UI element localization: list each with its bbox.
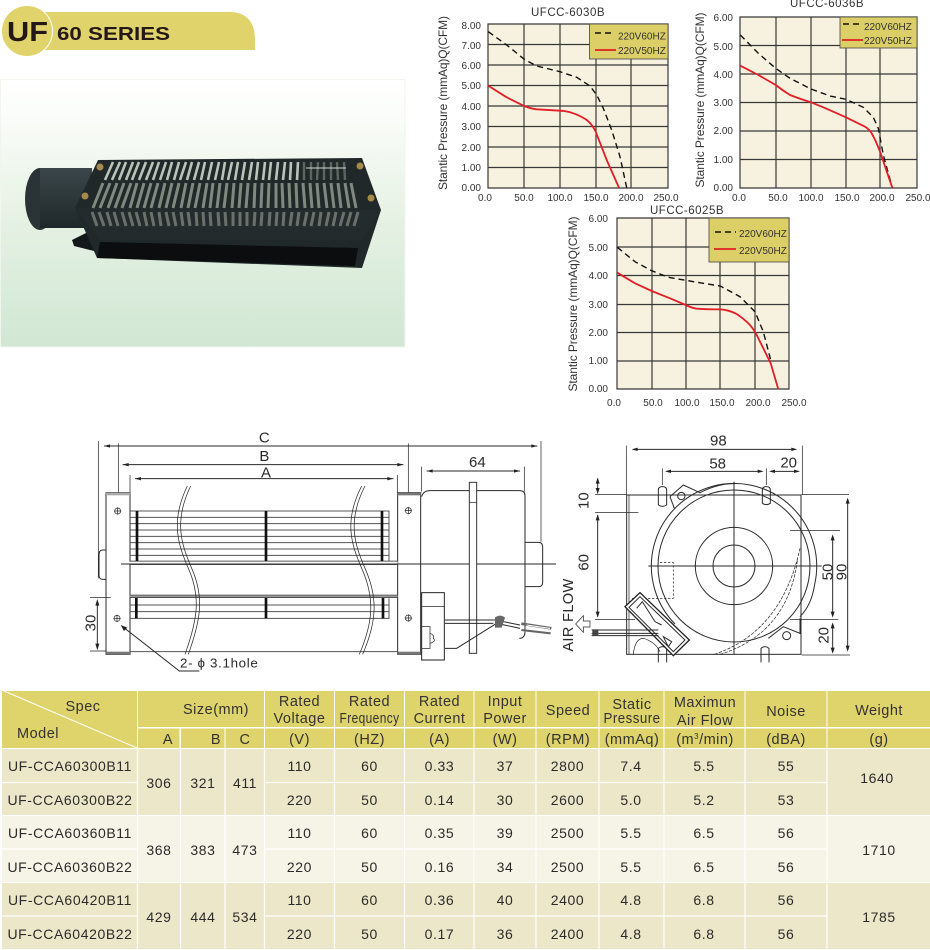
table header: C	[240, 732, 250, 748]
chart: UFCC-6030B: 1.00	[462, 163, 481, 174]
table group: UF-CCA60360	[7, 825, 896, 875]
end view technical drawing	[561, 433, 851, 662]
table header: Static	[612, 697, 652, 713]
dimension lines C B A 64: B	[259, 448, 269, 465]
table group: UF-CCA60420: 60	[361, 892, 378, 908]
table header: (W)	[493, 732, 517, 748]
table group: UF-CCA60360: 60	[361, 825, 378, 841]
dimension lines right: 90	[834, 564, 851, 580]
dimension lines right: 50	[819, 564, 836, 580]
table header: Speed	[546, 703, 590, 719]
table group: UF-CCA60420: 429	[146, 909, 172, 925]
series title banner	[2, 6, 255, 56]
table header: A	[163, 732, 173, 748]
table header: (V)	[289, 732, 310, 748]
legend: 220V50HZ	[739, 246, 787, 257]
dimension: 30	[82, 597, 111, 651]
table group: UF-CCA60300: 110	[287, 758, 312, 774]
table group: UF-CCA60420	[7, 892, 896, 942]
terminal block	[592, 593, 689, 656]
chart: UFCC-6030B: 7.00	[462, 41, 481, 52]
table group: UF-CCA60300: 1640	[860, 770, 894, 786]
chart: UFCC-6036B: 200.0	[869, 193, 895, 204]
table group: UF-CCA60420: UF-CCA60420B11	[8, 892, 132, 908]
table group: UF-CCA60360: UF-CCA60360B22	[7, 859, 133, 875]
table group: UF-CCA60360: 473	[232, 842, 258, 858]
fan circles	[632, 482, 822, 654]
table group: UF-CCA60360: 6.5	[693, 825, 715, 841]
table header: (m	[676, 732, 694, 748]
chart: UFCC-6025B	[566, 205, 807, 409]
table group: UF-CCA60420: 0.36	[425, 892, 454, 908]
hole callout	[121, 625, 258, 671]
table group: UF-CCA60420: 2400	[551, 892, 584, 908]
table group: UF-CCA60300: 0.33	[425, 758, 454, 774]
chart: UFCC-6030B: 5.00	[462, 81, 481, 92]
table group: UF-CCA60420: 444	[190, 909, 216, 925]
chart: UFCC-6030B: 50.0	[514, 193, 534, 204]
table group: UF-CCA60420: 36	[497, 926, 513, 942]
dimension lines C B A 64: 64	[469, 454, 486, 471]
table group: UF-CCA60420: 6.8	[693, 926, 715, 942]
table group: UF-CCA60300: UF-CCA60300B11	[8, 758, 132, 774]
table group: UF-CCA60300: 411	[233, 775, 257, 791]
table group: UF-CCA60300: 321	[190, 775, 216, 791]
hole callout: 2- ϕ 3.1hole	[180, 655, 258, 670]
table header: Power	[483, 711, 527, 727]
dimension lines left: 10	[575, 492, 592, 509]
table group: UF-CCA60300: 2600	[551, 792, 584, 808]
table header: Pressure	[604, 711, 660, 727]
chart: UFCC-6025B: 1.00	[589, 356, 608, 367]
product photo panel	[0, 80, 405, 347]
chart: UFCC-6030B: 4.00	[462, 102, 481, 113]
chart: UFCC-6025B: 150.0	[709, 398, 735, 409]
y axis labels: 6.00	[714, 13, 733, 24]
table group: UF-CCA60300: 306	[146, 775, 172, 791]
table group: UF-CCA60360: 56	[778, 859, 794, 875]
table group: UF-CCA60300: 50	[361, 792, 378, 808]
table group: UF-CCA60360: 50	[361, 859, 378, 875]
housing outline	[627, 495, 801, 654]
table group: UF-CCA60300: 5.0	[620, 792, 642, 808]
table header: (A)	[429, 732, 450, 748]
table header	[2, 691, 930, 748]
side view technical drawing	[82, 429, 556, 671]
chart: UFCC-6025B: 250.0	[781, 398, 807, 409]
dimension lines top: 98	[710, 433, 727, 450]
table header: Noise	[766, 704, 806, 720]
table group: UF-CCA60300: 53	[778, 792, 794, 808]
table header: Weight	[855, 703, 903, 719]
table group: UF-CCA60360: 34	[497, 859, 513, 875]
table header: Air Flow	[677, 713, 733, 729]
chart: UFCC-6036B	[693, 0, 930, 204]
icon: fan motor	[25, 168, 98, 252]
table header: Model	[17, 726, 59, 742]
series title banner: UF	[7, 16, 48, 47]
table header: (RPM)	[546, 732, 590, 748]
chart: UFCC-6025B: 200.0	[745, 398, 771, 409]
table header: 3	[694, 732, 699, 741]
table group: UF-CCA60300: UF-CCA60300B22	[7, 792, 133, 808]
60Hz curve	[488, 32, 627, 188]
dimension lines C B A 64	[98, 429, 541, 578]
60Hz curve	[740, 35, 892, 188]
table header: Input	[488, 694, 522, 710]
table group: UF-CCA60420: 534	[232, 909, 258, 925]
y axis labels: 8.00	[462, 21, 481, 32]
y axis title: Stantic Pressure (mmAq)Q(CFM)	[693, 12, 707, 188]
table group: UF-CCA60360: 110	[287, 825, 312, 841]
table group: UF-CCA60300: 30	[497, 792, 513, 808]
50Hz curve	[488, 86, 619, 188]
table group: UF-CCA60360: 56	[778, 825, 794, 841]
icon: blower housing	[75, 158, 381, 268]
table group: UF-CCA60360: 5.5	[620, 825, 642, 841]
y axis title: Stantic Pressure (mmAq)Q(CFM)	[436, 16, 450, 190]
table group: UF-CCA60300: 5.2	[693, 792, 715, 808]
chart: UFCC-6030B: 250.0	[653, 193, 679, 204]
table group: UF-CCA60360: 2500	[551, 825, 584, 841]
y axis title: Stantic Pressure (mmAq)Q(CFM)	[566, 216, 580, 392]
50Hz curve	[740, 66, 892, 188]
table group: UF-CCA60360: 39	[497, 825, 513, 841]
dimension lines top: 58	[709, 455, 726, 472]
x axis labels: 0.0	[732, 193, 746, 204]
table group: UF-CCA60420: 4.8	[620, 926, 642, 942]
table group: UF-CCA60360: 383	[190, 842, 216, 858]
dimension lines top: 20	[780, 454, 797, 471]
legend: 220V50HZ	[618, 46, 666, 57]
chart: UFCC-6036B: 4.00	[714, 70, 733, 81]
chart title: UFCC-6030B	[531, 7, 605, 19]
table group: UF-CCA60300: 55	[778, 758, 794, 774]
chart title: UFCC-6025B	[650, 205, 724, 217]
table group: UF-CCA60420: 56	[778, 926, 794, 942]
mounting slots	[658, 487, 770, 662]
table header: (mmAq)	[605, 732, 659, 748]
table header: (dBA)	[766, 732, 806, 748]
table group: UF-CCA60420: 56	[778, 892, 794, 908]
table header: /min)	[699, 732, 734, 748]
chart: UFCC-6025B: 5.00	[589, 243, 608, 254]
table group: UF-CCA60420: 40	[497, 892, 513, 908]
dimension lines right: 20	[815, 627, 832, 644]
table header: Size(mm)	[183, 702, 249, 718]
table group: UF-CCA60300: 7.4	[620, 758, 642, 774]
chart: UFCC-6036B: 0.00	[714, 183, 733, 194]
legend	[709, 218, 789, 262]
table row backgrounds	[2, 749, 930, 949]
legend: 220V50HZ	[864, 36, 912, 47]
table group: UF-CCA60300: 0.14	[425, 792, 454, 808]
table header: B	[211, 732, 221, 748]
table group: UF-CCA60300: 2800	[551, 758, 584, 774]
table group: UF-CCA60300: 5.5	[693, 758, 715, 774]
chart: UFCC-6025B: 0.00	[589, 384, 608, 395]
table header: Current	[414, 711, 465, 727]
chart: UFCC-6036B: 250.0	[905, 193, 930, 204]
dimension lines left: 60	[575, 554, 592, 571]
chart: UFCC-6036B: 150.0	[834, 193, 860, 204]
chart: UFCC-6036B: 100.0	[798, 193, 824, 204]
chart: UFCC-6036B: 1.00	[714, 155, 733, 166]
table header: Rated	[419, 694, 460, 710]
dimension lines top	[626, 433, 802, 495]
x axis labels: 0.0	[478, 193, 492, 204]
table header: Rated	[279, 694, 320, 710]
60Hz curve	[617, 247, 771, 360]
table group: UF-CCA60420: 4.8	[620, 892, 642, 908]
chart: UFCC-6030B: 100.0	[547, 193, 573, 204]
air flow label and arrow: AIR FLOW	[561, 578, 577, 652]
chart: UFCC-6036B: 5.00	[714, 42, 733, 53]
legend: 220V60HZ	[739, 229, 787, 240]
end plates	[99, 493, 421, 654]
table group: UF-CCA60420: 6.8	[693, 892, 715, 908]
break lines	[177, 486, 374, 654]
table group: UF-CCA60420: 0.17	[425, 926, 454, 942]
table group: UF-CCA60360: 220	[287, 859, 312, 875]
table header: Voltage	[274, 711, 325, 727]
chart: UFCC-6036B: 50.0	[768, 193, 788, 204]
chart: UFCC-6030B: 200.0	[618, 193, 644, 204]
table group: UF-CCA60360: 5.5	[620, 859, 642, 875]
table group: UF-CCA60420: 110	[287, 892, 312, 908]
chart: UFCC-6030B: 3.00	[462, 122, 481, 133]
table group: UF-CCA60360: 368	[146, 842, 172, 858]
chart: UFCC-6030B	[436, 7, 679, 204]
table group: UF-CCA60360: 0.16	[425, 859, 454, 875]
air flow label and arrow	[561, 578, 590, 652]
table header: Frequency	[340, 711, 400, 727]
legend: 220V60HZ	[618, 32, 666, 42]
table header: Rated	[349, 694, 390, 710]
table group: UF-CCA60300	[7, 758, 894, 808]
table group: UF-CCA60360: UF-CCA60360B11	[8, 825, 132, 841]
chart: UFCC-6025B: 2.00	[589, 328, 608, 339]
table group: UF-CCA60360: 6.5	[693, 859, 715, 875]
legend	[840, 17, 917, 48]
table group: UF-CCA60420: 50	[361, 926, 378, 942]
table group: UF-CCA60360: 2500	[551, 859, 584, 875]
chart: UFCC-6030B: 0.00	[462, 183, 481, 194]
table header: (HZ)	[354, 732, 385, 748]
motor	[422, 482, 552, 660]
table header: (g)	[869, 732, 889, 748]
chart: UFCC-6025B: 3.00	[589, 300, 608, 311]
table group: UF-CCA60300: 37	[497, 758, 513, 774]
dimension: 30: 30	[82, 615, 99, 631]
table header: Spec	[65, 699, 101, 715]
blower ribs	[121, 511, 556, 652]
y axis labels: 6.00	[589, 214, 608, 225]
table header: Maximun	[674, 695, 736, 711]
chart: UFCC-6030B: 150.0	[583, 193, 609, 204]
table group: UF-CCA60420: 2400	[551, 926, 584, 942]
legend	[590, 24, 668, 59]
table group: UF-CCA60420: 220	[287, 926, 312, 942]
specification table	[2, 691, 930, 949]
table group: UF-CCA60300: 60	[361, 758, 378, 774]
table group: UF-CCA60360: 0.35	[425, 825, 454, 841]
table group: UF-CCA60420: 1785	[862, 909, 896, 925]
chart: UFCC-6036B: 2.00	[714, 126, 733, 137]
chart: UFCC-6030B: 2.00	[462, 143, 481, 154]
dimension lines C B A 64: C	[259, 429, 270, 446]
chart: UFCC-6025B: 4.00	[589, 271, 608, 282]
chart: UFCC-6025B: 100.0	[674, 398, 700, 409]
50Hz curve	[617, 273, 778, 389]
chart: UFCC-6030B: 6.00	[462, 61, 481, 72]
legend: 220V60HZ	[864, 22, 912, 33]
table group: UF-CCA60420: UF-CCA60420B22	[7, 926, 133, 942]
table group: UF-CCA60360: 1710	[862, 842, 896, 858]
table group: UF-CCA60300: 220	[287, 792, 312, 808]
chart: UFCC-6025B: 50.0	[643, 398, 663, 409]
dimension lines left	[575, 478, 638, 620]
dimension lines C B A 64: A	[261, 465, 271, 482]
dimension lines right	[790, 494, 851, 655]
chart: UFCC-6036B: 3.00	[714, 98, 733, 109]
series title banner: 60 SERIES	[57, 24, 170, 44]
x axis labels: 0.0	[607, 398, 621, 409]
